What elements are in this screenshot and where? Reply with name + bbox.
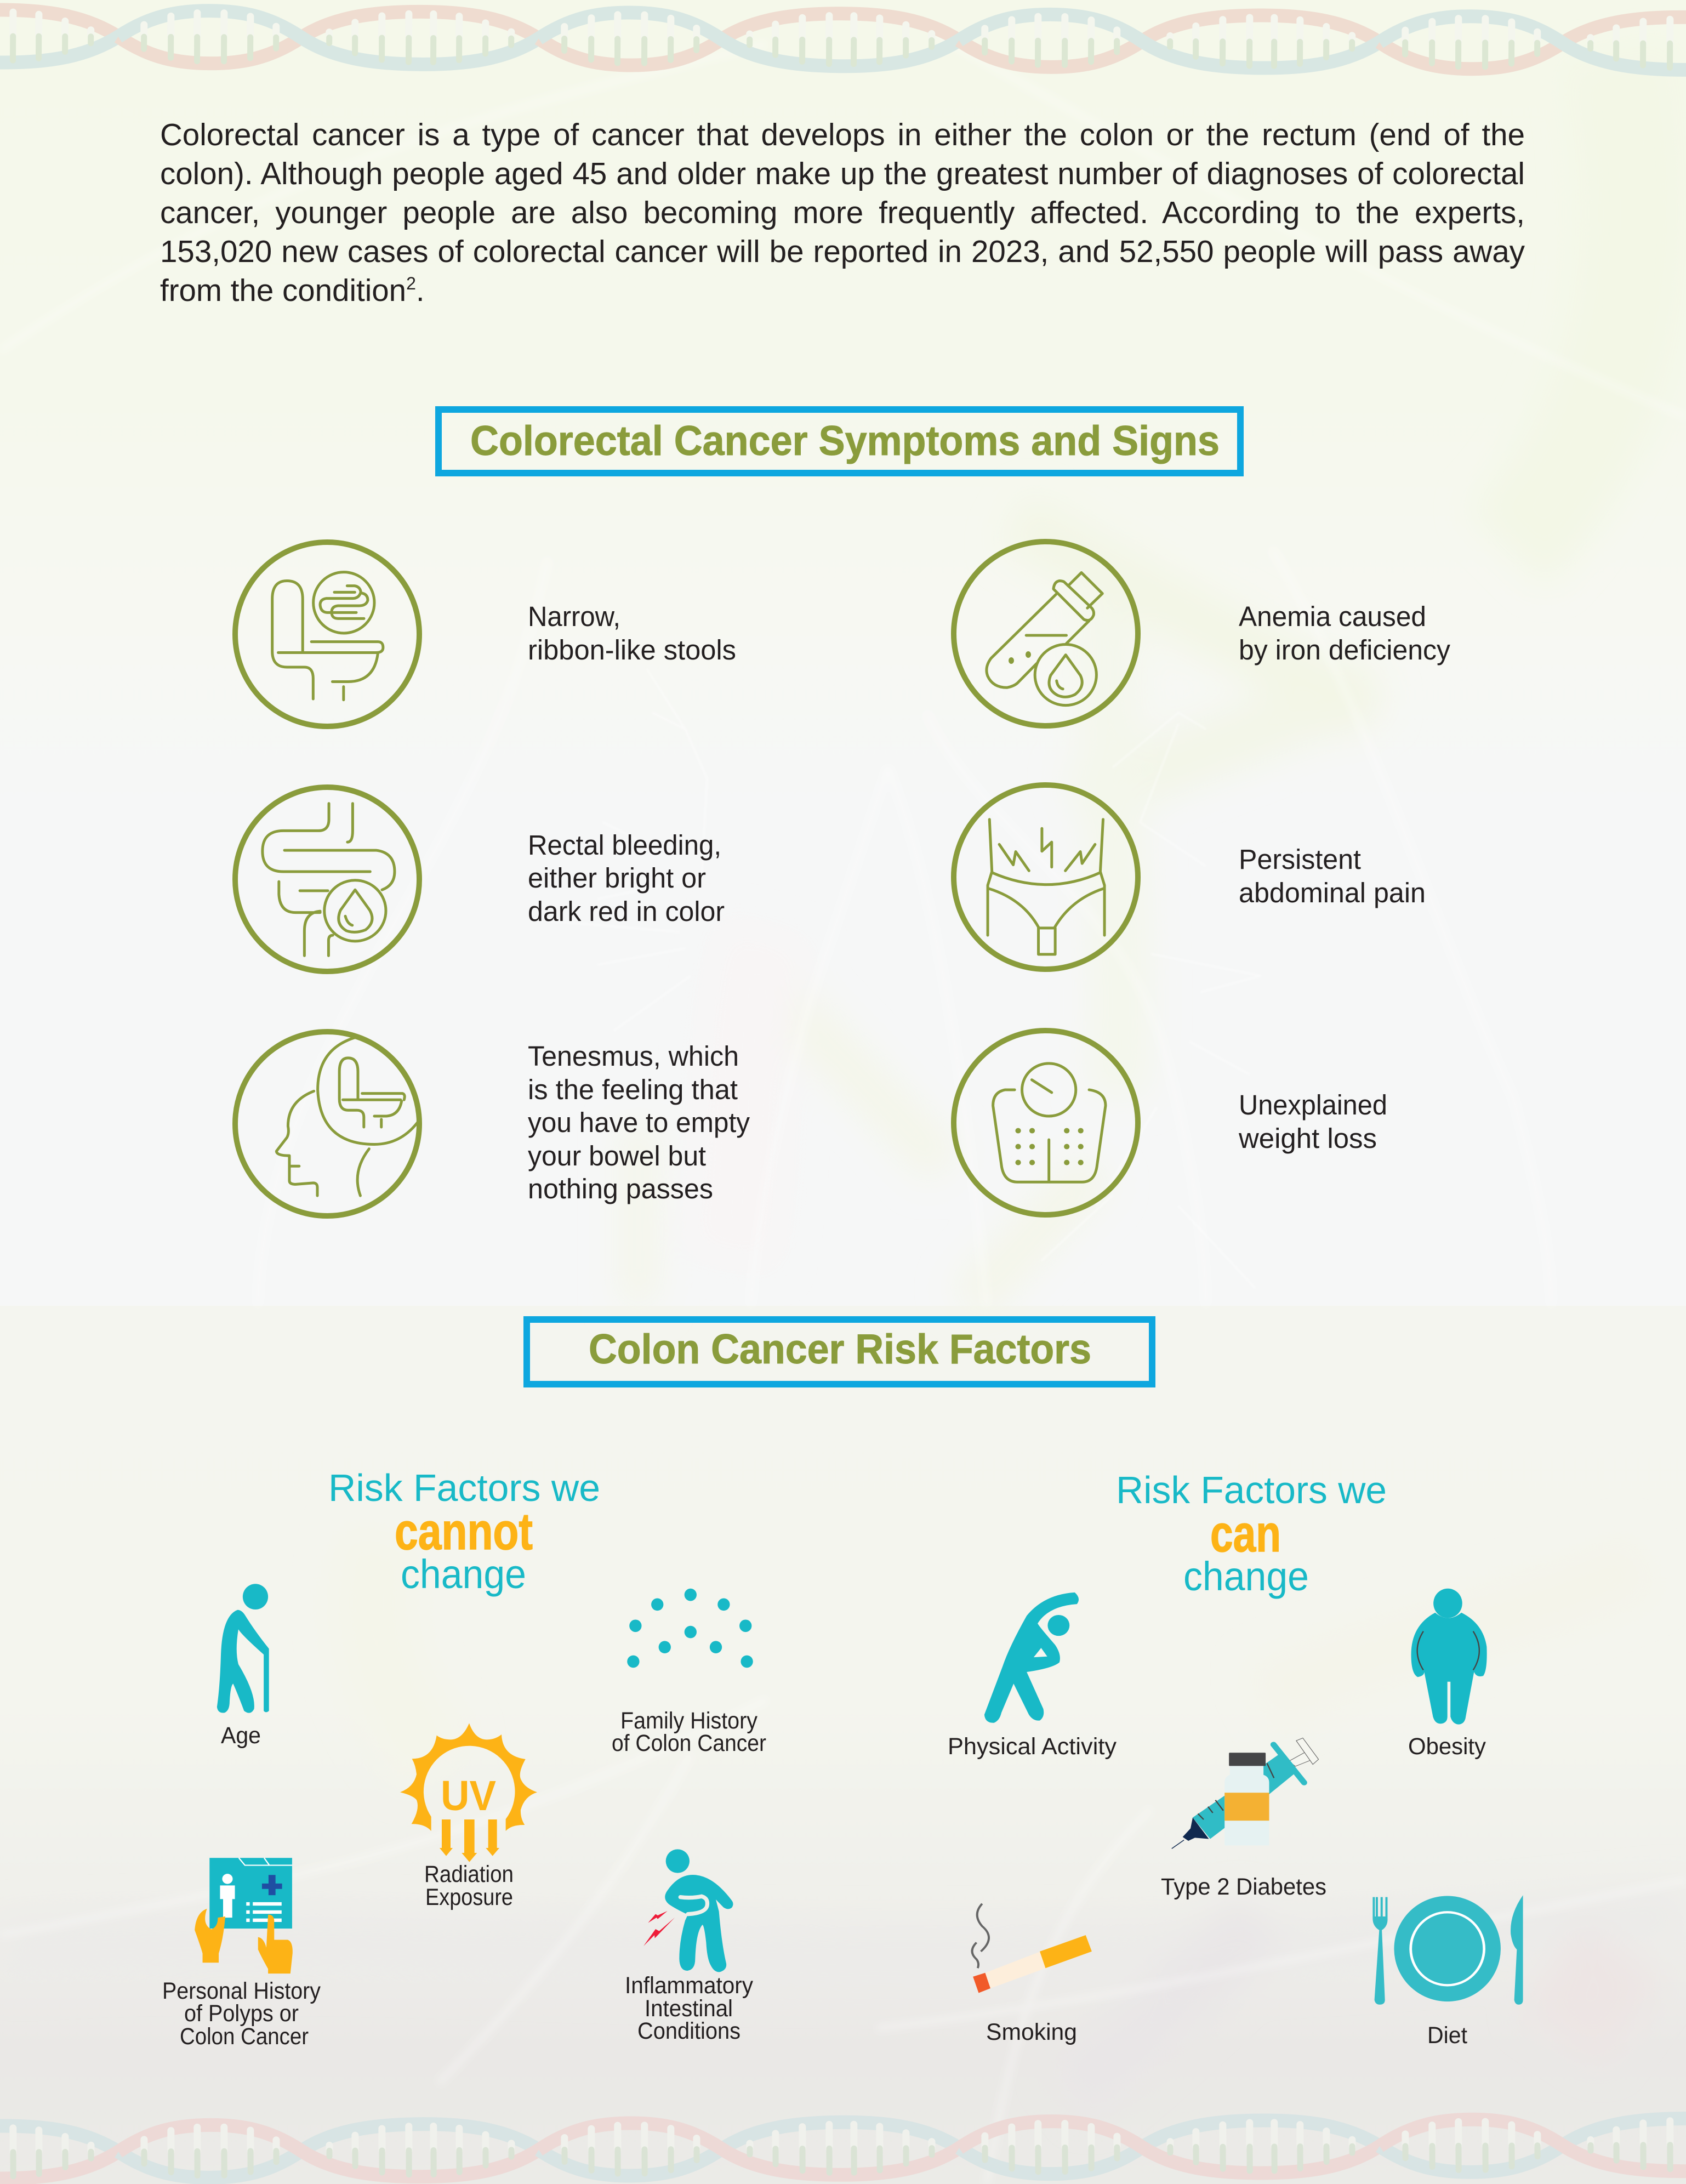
decorative DNA strand: top	[0, 9, 1686, 70]
symptom: weight loss	[954, 1031, 1387, 1215]
label: personal history: Personal History	[162, 1978, 321, 2004]
label: inflammatory conditions: Conditions	[637, 2018, 741, 2044]
subheading: cannot change: Risk Factors we	[328, 1466, 600, 1509]
label: obesity: Obesity	[1408, 1733, 1486, 1760]
label: abdominal pain: Persistent	[1239, 844, 1361, 875]
intro text block	[160, 117, 1525, 308]
subheading: can change: can	[1210, 1505, 1281, 1563]
label: rectal bleeding: either bright or	[528, 862, 706, 894]
background: upper section	[0, 0, 1686, 1306]
subheading: cannot change: change	[401, 1551, 526, 1597]
label: physical activity: Physical Activity	[948, 1733, 1117, 1760]
label: inflammatory conditions	[625, 1972, 753, 2044]
label: radiation exposure	[424, 1861, 514, 1910]
label: radiation exposure: Radiation	[424, 1861, 514, 1887]
subheading: can change	[1116, 1469, 1387, 1599]
label: abdominal pain: abdominal pain	[1239, 877, 1426, 908]
icon: toilet with ribbon stool	[235, 542, 419, 726]
heading: colon cancer risk factors: Colon Cancer Risk Factors	[589, 1326, 1091, 1373]
icon: person with bowel inflammation	[643, 1849, 733, 1972]
background: lower section	[0, 1306, 1686, 2184]
label: anemia	[1239, 601, 1450, 666]
symptom: anemia	[954, 542, 1450, 726]
panel: risk factors we cannot change	[162, 1466, 766, 2050]
icon: cigarette with smoke	[972, 1904, 1092, 1993]
label: smoking: Smoking	[986, 2019, 1077, 2045]
intro text block: cancer, younger people are also becoming more frequently affected. According to the experts,	[160, 195, 1525, 230]
icon: syringe and vial	[1172, 1738, 1319, 1849]
label: abdominal pain	[1239, 844, 1426, 908]
heading: symptoms and signs	[438, 410, 1240, 473]
heading: symptoms and signs: Colorectal Cancer Symptoms and Signs	[470, 418, 1220, 464]
label: anemia: by iron deficiency	[1239, 634, 1450, 666]
label: weight loss: weight loss	[1238, 1123, 1377, 1154]
label: diet: Diet	[1427, 2022, 1467, 2049]
icon: elderly person with cane	[217, 1584, 269, 1713]
intro text block: 153,020 new cases of colorectal cancer will be reported in 2023, and 52,550 people will pass away	[160, 234, 1525, 269]
label: weight loss: Unexplained	[1239, 1089, 1387, 1121]
label: tenesmus: Tenesmus, which	[528, 1040, 739, 1072]
label: narrow stools	[528, 601, 736, 666]
label: tenesmus: you have to empty	[528, 1107, 750, 1138]
subheading: cannot change	[328, 1466, 600, 1597]
symptom: tenesmus	[235, 1032, 750, 1216]
label: weight loss	[1238, 1089, 1387, 1154]
label: tenesmus: your bowel but	[528, 1140, 706, 1171]
label: tenesmus: nothing passes	[528, 1173, 713, 1204]
label: family history: Family History	[620, 1708, 757, 1734]
icon: plate with fork and knife	[1372, 1895, 1523, 2005]
intro text block: colon). Although people aged 45 and older make up the greatest number of diagnoses of colorectal	[160, 156, 1525, 191]
label: inflammatory conditions: Intestinal	[645, 1995, 733, 2022]
label: narrow stools: ribbon-like stools	[528, 634, 736, 666]
decorative DNA strand: bottom	[0, 2118, 1686, 2180]
label: rectal bleeding: Rectal bleeding,	[528, 829, 721, 861]
icon: medical record held by hands	[195, 1858, 293, 1973]
label: radiation exposure: Exposure	[425, 1884, 513, 1910]
intro text block: Colorectal cancer is a type of cancer that develops in either the colon or the rectum (end of the	[160, 117, 1525, 152]
label: personal history	[162, 1978, 321, 2050]
label: rectal bleeding	[528, 829, 725, 927]
icon: obese person	[1411, 1589, 1487, 1725]
label: rectal bleeding: dark red in color	[528, 896, 725, 927]
label: family history: of Colon Cancer	[612, 1730, 766, 1756]
label: personal history: of Polyps or	[184, 2000, 299, 2027]
icon: family history dots	[627, 1589, 753, 1668]
icon: head thinking of toilet	[235, 1032, 420, 1216]
label: family history	[612, 1708, 766, 1756]
icon: weighing scale	[954, 1031, 1138, 1215]
label: tenesmus	[528, 1040, 750, 1204]
icon: UV sun	[400, 1723, 537, 1862]
subheading: can change: change	[1183, 1554, 1309, 1599]
icon: abdomen with pain bolts	[954, 785, 1138, 969]
label: age: Age	[221, 1722, 261, 1749]
label: tenesmus: is the feeling that	[528, 1074, 738, 1105]
label: type 2 diabetes: Type 2 Diabetes	[1161, 1874, 1326, 1900]
label: narrow stools: Narrow,	[528, 601, 620, 632]
icon: UV sun: UV	[441, 1772, 496, 1819]
intro text block: from the condition2.	[160, 273, 425, 308]
label: personal history: Colon Cancer	[180, 2023, 309, 2050]
icon: test tube with blood drop	[954, 542, 1138, 726]
panel: risk factors we can change	[948, 1469, 1523, 2049]
heading: colon cancer risk factors	[527, 1320, 1152, 1384]
symptom: abdominal pain	[954, 785, 1426, 969]
label: anemia: Anemia caused	[1239, 601, 1426, 632]
icon: person stretching	[984, 1593, 1079, 1723]
subheading: cannot change: cannot	[395, 1503, 533, 1561]
symptom: rectal bleeding	[235, 787, 725, 971]
symptom: narrow stools	[235, 542, 736, 726]
subheading: can change: Risk Factors we	[1116, 1469, 1387, 1511]
icon: intestine with blood drop	[235, 787, 419, 971]
label: inflammatory conditions: Inflammatory	[625, 1972, 753, 1999]
